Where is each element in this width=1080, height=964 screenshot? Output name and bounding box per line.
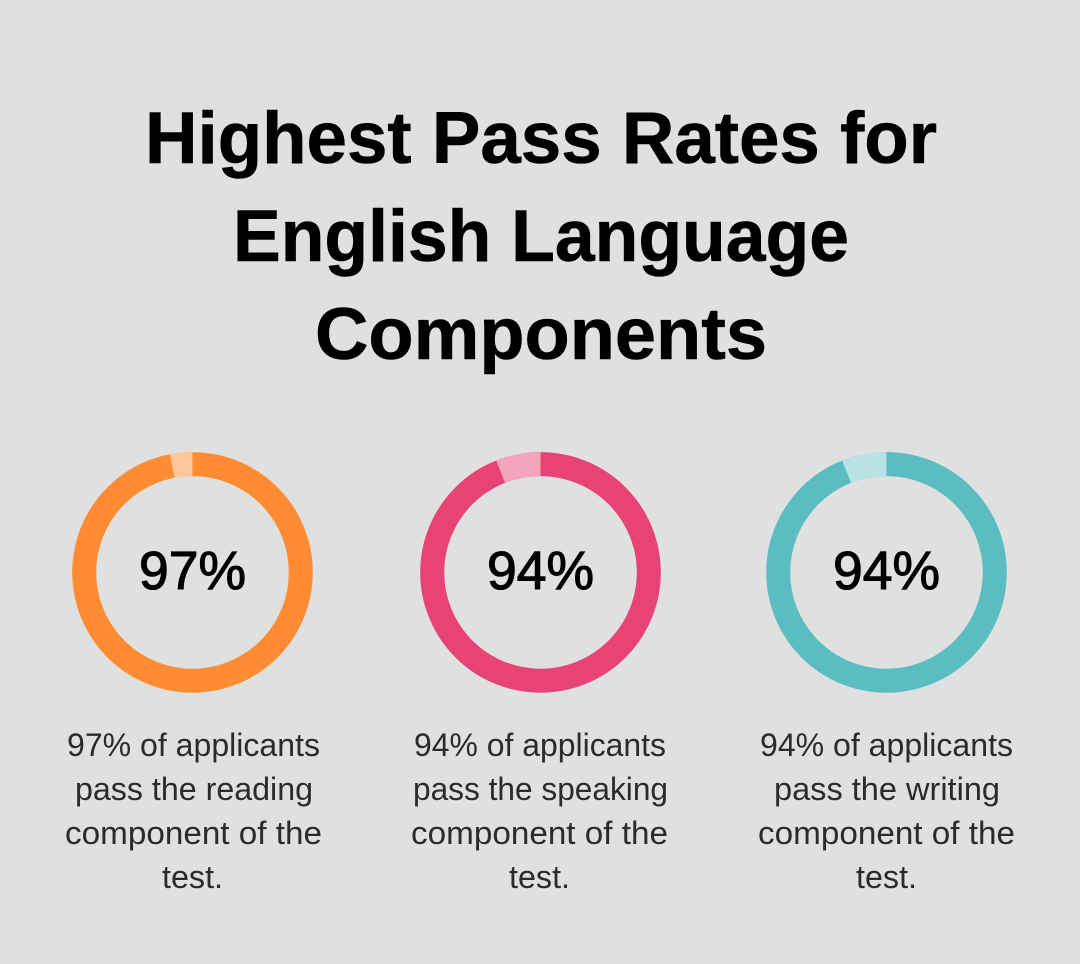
description: speaking — [411, 727, 668, 895]
value: 94% writing: 94% — [833, 541, 940, 601]
description: speaking: 94% of applicants — [414, 727, 666, 763]
description: writing: 94% of applicants — [760, 727, 1013, 763]
panel: writing — [758, 464, 1015, 895]
title: English Language — [233, 196, 849, 277]
description: reading: component of the — [65, 815, 322, 851]
description: reading — [65, 727, 322, 895]
description: reading: test. — [162, 859, 223, 895]
description: writing: pass the writing — [774, 771, 1000, 807]
description: reading: 97% of applicants — [67, 727, 320, 763]
title: Highest Pass Rates for — [145, 98, 937, 179]
title — [145, 98, 937, 375]
description: writing: test. — [856, 859, 917, 895]
description: speaking: test. — [509, 859, 570, 895]
description: speaking: component of the — [411, 815, 668, 851]
donut chart: 94% speaking — [432, 464, 649, 681]
value: 97%: 97% — [139, 541, 246, 601]
description: writing: component of the — [758, 815, 1015, 851]
description: reading: pass the reading — [75, 771, 313, 807]
donut chart: 94% writing — [778, 464, 995, 681]
value: 94% speaking: 94% — [487, 541, 594, 601]
donut chart: 97% — [84, 464, 301, 681]
description: speaking: pass the speaking — [413, 771, 668, 807]
panel: reading — [65, 464, 322, 895]
title: Components — [315, 294, 767, 375]
panel: speaking — [411, 464, 668, 895]
description: writing — [758, 727, 1015, 895]
